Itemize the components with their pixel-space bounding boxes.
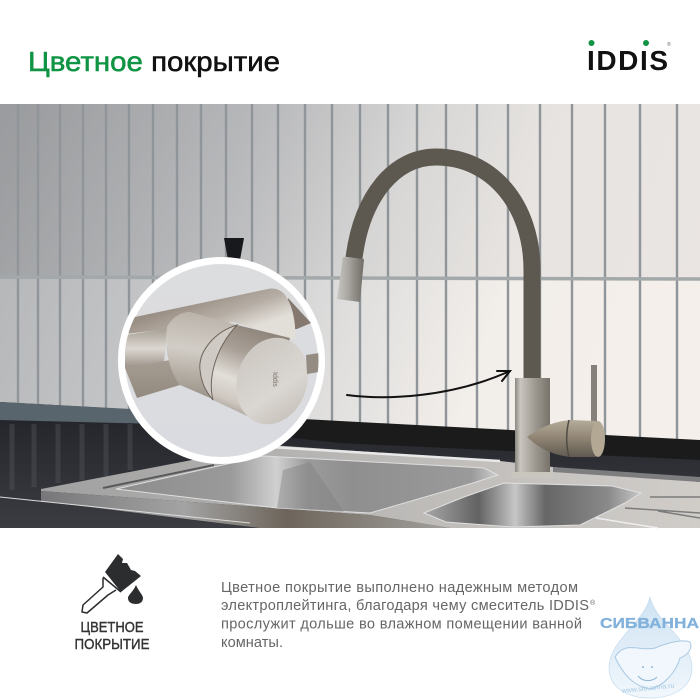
faucet handle [527,420,605,457]
watermark url: www.sibvanna.ru [620,682,675,695]
tiled wall [0,104,700,444]
icon label: ЦВЕТНОЕ [80,619,144,636]
faucet spout [354,157,532,382]
watermark bath [615,641,691,689]
description text: ® [590,599,596,607]
title: Цветное покрытие [28,46,280,77]
arrow [347,371,510,397]
brush bristles [105,554,141,592]
zoom circle: handle detail [122,260,322,460]
faucet pull-out tip [337,257,364,302]
black object behind the zoom circle [224,238,244,260]
photo: kitchen sink with faucet [0,104,700,528]
description text: Цветное покрытие выполнено надежным методом [221,580,578,596]
upper pipe [128,288,296,334]
icon label: ПОКРЫТИЕ [74,636,150,653]
watermark bath face [638,666,657,681]
description text: электроплейтинга, благодаря чему смеситель IDDIS [221,598,589,614]
icon: paint brush and drop [82,554,143,613]
watermark: Sibvanna [600,597,699,698]
faucet [337,157,605,478]
logo: IDDIS: IDDIS [587,45,668,76]
sink front face [41,491,450,528]
brush ferrule and handle [82,577,121,613]
paint drop [128,585,143,604]
knob cylinder [212,325,290,416]
small sink bowl [424,483,641,527]
drainboard grooves [596,497,700,528]
thin rear pipe [288,298,311,330]
knob end face [236,338,308,424]
engraved brand on knob: Iddis [271,372,278,387]
left body upper [125,329,167,368]
knob collar [200,325,237,400]
countertop [0,420,700,528]
logo: IDDIS: ® [667,41,671,48]
description text [221,580,596,651]
sink deck [0,445,700,528]
watermark name: СИБВАННА [600,615,699,632]
large sink bowl [116,456,498,513]
watermark drop [609,597,692,698]
icon label [74,619,150,653]
description text: прослужит дольше во влажном помещении ванной [221,616,582,632]
faucet lever [591,365,597,423]
small right pipe [306,353,319,374]
neck [166,312,237,400]
left body lower [125,360,180,398]
description text: комнаты. [221,635,283,651]
faucet body [512,378,553,478]
dark backsplash band [0,402,700,470]
